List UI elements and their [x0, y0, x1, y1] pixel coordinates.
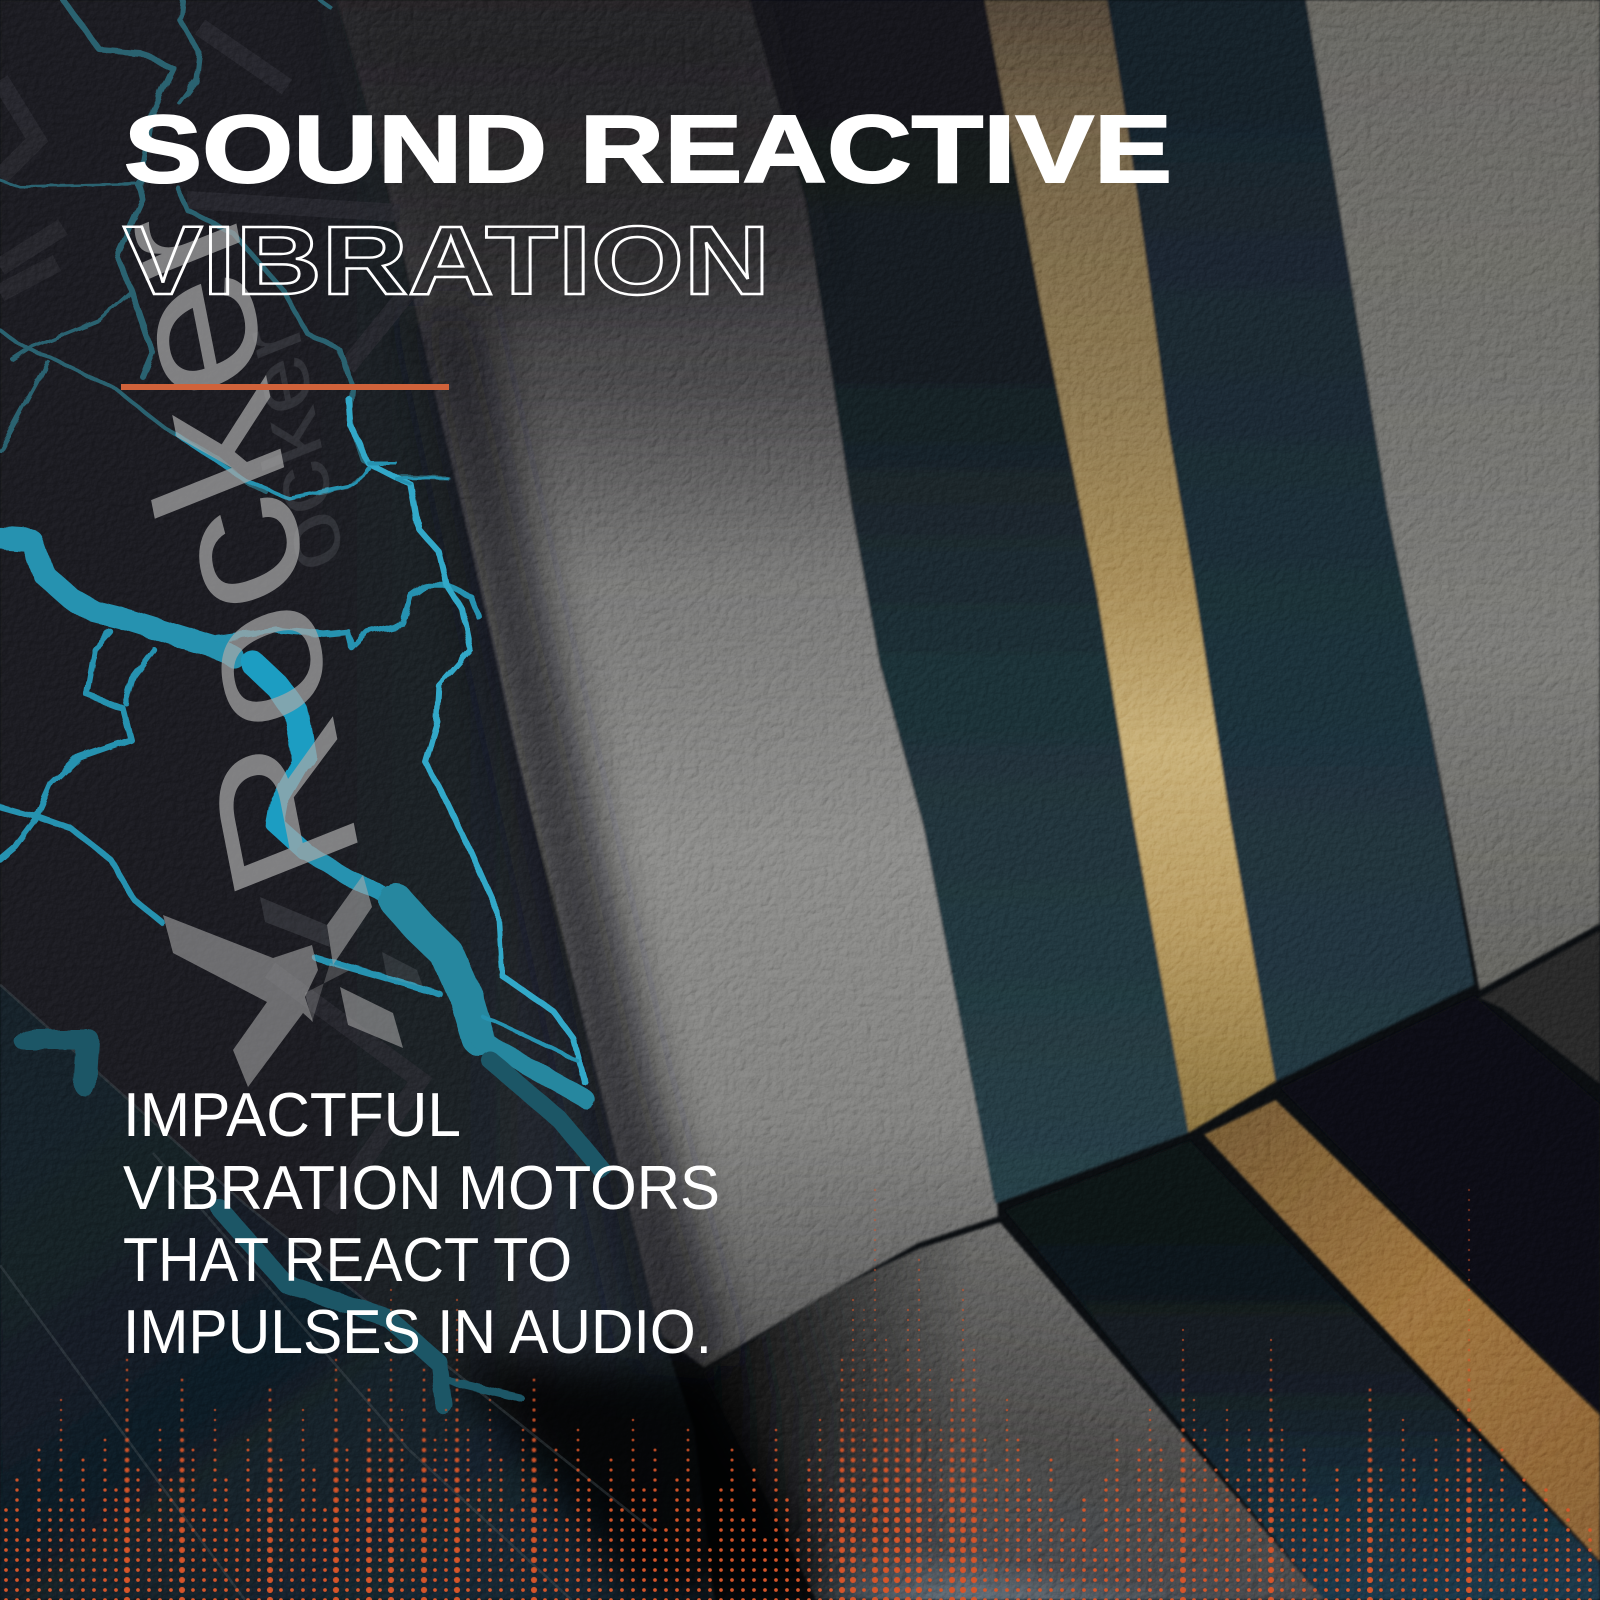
panel: grey seat — [704, 1222, 1324, 1600]
dots: bright tall columns — [126, 1188, 1470, 1510]
seam lines on lower left bolster — [0, 985, 653, 1600]
panel: black seat right — [1281, 996, 1600, 1413]
logo: ghost print: ocker — [222, 308, 362, 590]
panel: grey leather back rest — [337, 0, 998, 1367]
body copy — [123, 1081, 720, 1367]
shading on grey panel edge — [337, 0, 837, 1600]
faint geometric print on bolster — [0, 27, 420, 1210]
body copy: IMPACTFUL — [123, 1081, 461, 1150]
logo: X mark — [163, 875, 403, 1087]
dots: bright tall columns medium — [124, 1348, 1472, 1600]
panel: gold back rest strip — [985, 0, 1276, 1133]
dots: large lower layer — [4, 1428, 1592, 1600]
sound wave dot equaliser — [6, 1183, 1590, 1600]
orange accent rule — [121, 384, 449, 390]
lightning: main branches — [0, 400, 585, 1099]
lightning: upper dim branches — [0, 0, 447, 497]
dots: fine upper layer — [6, 1309, 1525, 1510]
body copy: IMPULSES IN AUDIO. — [123, 1298, 712, 1367]
panel: black lightning-print side bolster — [0, 0, 714, 1600]
dots: bright tall columns large — [124, 1427, 1472, 1600]
panel: light grey back rest right — [1306, 0, 1600, 990]
lightning: lower dim branches — [25, 1040, 602, 1405]
panel: charcoal seat corner — [1480, 931, 1600, 1084]
coarse pebble texture on gold and grey panels — [502, 0, 1600, 1600]
body copy: VIBRATION MOTORS — [123, 1154, 720, 1223]
panel: lower left bolster — [0, 985, 714, 1600]
logo: ghost print — [222, 308, 423, 987]
panel: dark teal back rest right — [1107, 0, 1474, 1082]
heading: VIBRATION outlined: VIBRATION — [123, 206, 770, 315]
lightning print — [0, 0, 602, 1405]
body copy: THAT REACT TO — [123, 1226, 572, 1295]
xRocker logo printed on bolster — [67, 171, 423, 1087]
logo: wordmark: Rocker — [67, 171, 399, 924]
panel: gold seat strip — [1204, 1100, 1600, 1561]
heading: SOUND REACTIVE: SOUND REACTIVE — [124, 96, 1172, 203]
panel: dark teal back rest — [750, 0, 1189, 1204]
panel: black and teal seat — [1005, 1141, 1600, 1600]
shading: dark seat crease — [449, 1357, 837, 1600]
dots: medium layer — [4, 1350, 1592, 1600]
